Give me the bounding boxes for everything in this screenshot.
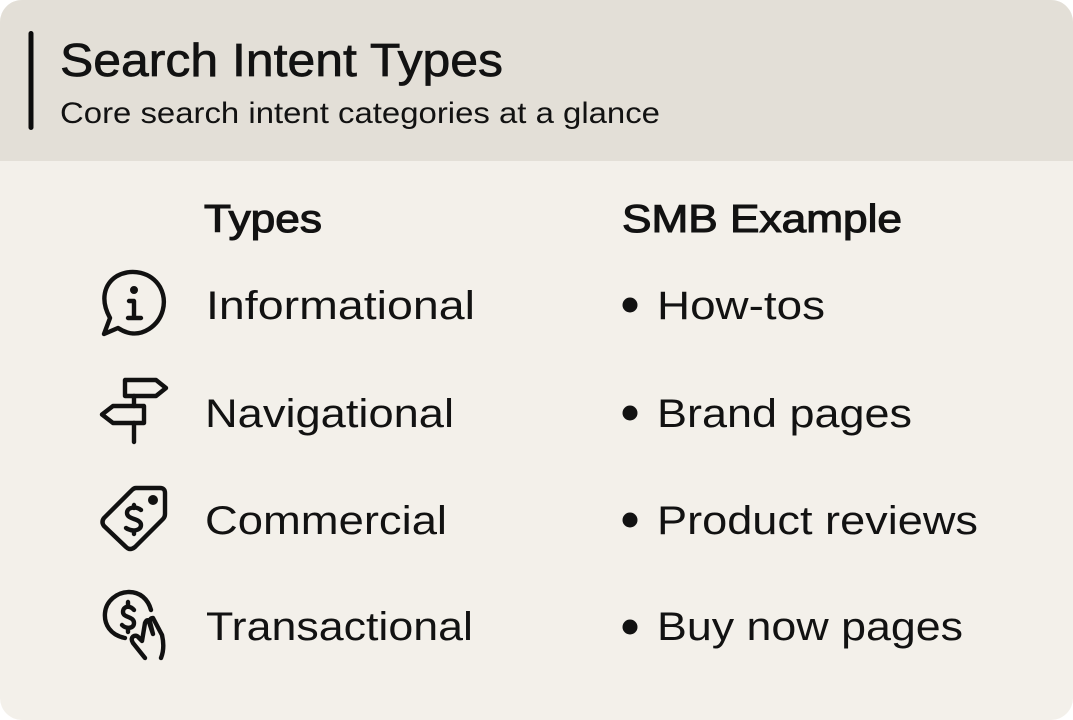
bullet: How-tos: How-tos [657,284,825,328]
label: Transactional: Transactional [206,605,473,649]
column heading: Types: Types [204,198,322,241]
icon: hand tapping dollar coin [105,592,163,658]
icon: signpost [102,380,166,442]
bullet: Product reviews: Product reviews [657,499,978,543]
label: Commercial: Commercial [205,499,447,543]
header accent bar [28,31,34,130]
column heading: SMB Example: SMB Example [622,198,902,241]
subtitle: Core search intent categories at a glance [60,97,660,130]
title: Search Intent Types [60,34,503,86]
panel: header band [0,0,1073,161]
label: Informational: Informational [206,284,475,328]
icon: price tag with dollar [102,488,165,549]
label: Navigational: Navigational [205,392,454,436]
bullet: Brand pages: Brand pages [657,392,912,436]
bullet: Buy now pages: Buy now pages [657,605,963,649]
icon: information speech bubble [104,272,164,334]
